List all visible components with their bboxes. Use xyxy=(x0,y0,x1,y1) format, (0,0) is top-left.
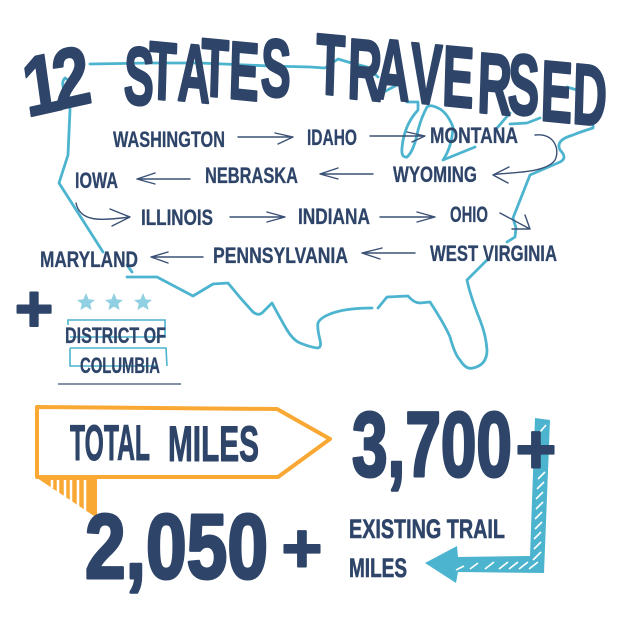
label: existing trail miles xyxy=(349,514,505,583)
state route labels: INDIANA xyxy=(298,204,370,229)
title xyxy=(17,15,608,145)
existing trail number: 2,050 xyxy=(85,496,268,598)
state route labels: MARYLAND xyxy=(40,247,138,272)
label: existing trail miles: EXISTING TRAIL xyxy=(349,514,505,544)
signpost: total miles: MILES xyxy=(168,416,259,472)
banner: District of Columbia xyxy=(58,320,181,384)
plus after total: + xyxy=(516,410,556,488)
signpost: total miles: TOTAL xyxy=(70,415,150,471)
map: USA outline xyxy=(59,59,593,368)
state route labels: MONTANA xyxy=(430,123,518,148)
banner: District of Columbia: COLUMBIA xyxy=(80,353,160,378)
state route labels: IOWA xyxy=(75,168,118,193)
state route labels: WYOMING xyxy=(393,162,477,187)
state route labels xyxy=(40,123,557,272)
title: STATES xyxy=(123,22,292,124)
state route labels: WASHINGTON xyxy=(113,127,225,152)
state route labels: PENNSYLVANIA xyxy=(213,243,348,268)
state route labels: ILLINOIS xyxy=(141,205,213,230)
state route labels: NEBRASKA xyxy=(205,163,298,188)
state route labels: WEST VIRGINIA xyxy=(430,241,557,266)
arrow: existing trail miles xyxy=(425,418,550,583)
plus sign: + xyxy=(15,271,53,345)
banner: District of Columbia: DISTRICT OF xyxy=(65,323,166,348)
label: existing trail miles: MILES xyxy=(349,553,407,583)
plus after existing: + xyxy=(282,509,322,587)
state route labels: IDAHO xyxy=(307,125,357,150)
icon: three stars xyxy=(77,293,152,310)
total miles number: 3,700 xyxy=(352,394,512,496)
title: TRAVERSED xyxy=(315,15,608,145)
signpost: total miles xyxy=(37,407,330,518)
title: 12 xyxy=(17,28,96,135)
state route labels: OHIO xyxy=(450,202,488,227)
route arrows xyxy=(76,132,557,263)
